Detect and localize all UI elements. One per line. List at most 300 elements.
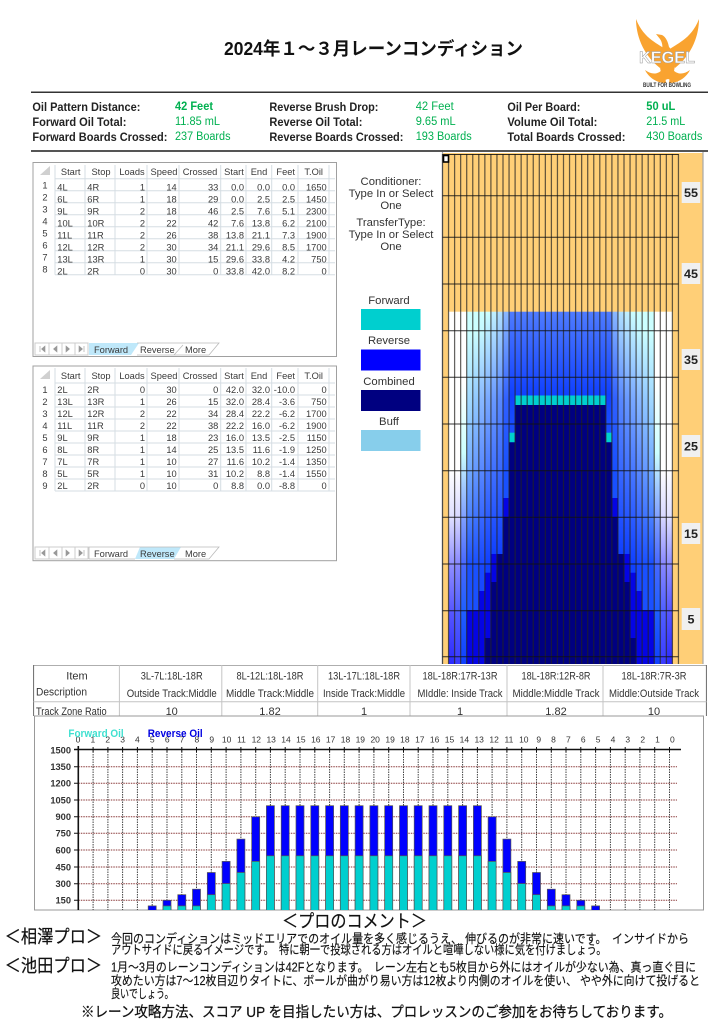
panel: forward table: 13.8 (226, 230, 244, 240)
panel: forward table: Crossed (183, 167, 217, 177)
panel: forward table: 34 (208, 242, 218, 252)
chart: oil per board bars: 9 (209, 734, 214, 744)
chart: lane oil pattern graph (442, 152, 703, 664)
panel: forward table: 2300 (306, 206, 327, 216)
panel: forward table: 0.0 (282, 182, 295, 192)
panel: reverse table: 32.0 (252, 385, 270, 395)
text block: Aizawa comment: ＜相澤プロ＞ (5, 927, 102, 947)
panel: reverse table: 25 (208, 445, 218, 455)
panel: oil pattern summary: Reverse Oil Total: (269, 117, 362, 129)
chart: oil per board bars: 750 (55, 829, 71, 839)
panel: forward table: 0.0 (231, 194, 244, 204)
panel: reverse table: 1250 (306, 445, 327, 455)
panel: reverse table: 7R (87, 457, 99, 467)
panel: reverse table: 0 (322, 385, 327, 395)
panel: reverse table: 10.2 (226, 469, 244, 479)
chart: oil per board bars: 2 (105, 734, 110, 744)
chart: lane oil pattern graph: 55 (684, 186, 698, 200)
chart: oil per board bars: 2 (640, 734, 645, 744)
panel: forward table: 42.0 (252, 266, 270, 276)
chart: oil per board bars: 16 (430, 734, 440, 744)
chart: oil per board bars: 20 (370, 734, 380, 744)
title: 2024年１～３月レーンコンディション (224, 38, 523, 59)
chart: oil per board bars: Forward Oil (68, 728, 124, 740)
panel: forward table: 6R (87, 194, 99, 204)
panel: reverse table: 22.2 (252, 409, 270, 419)
panel: forward table: 2 (140, 242, 145, 252)
panel: forward table: 33.8 (226, 266, 244, 276)
panel: reverse table: 32.0 (226, 397, 244, 407)
panel: reverse table: -8.8 (279, 481, 295, 491)
chart: oil per board bars: 5 (596, 734, 601, 744)
chart: lane oil pattern graph: 35 (684, 353, 698, 367)
chart: oil per board bars: 8 (551, 734, 556, 744)
chart: oil per board bars: 18 (400, 734, 410, 744)
panel: track zone ratio table: Inside Track:Middle (323, 688, 405, 700)
panel: forward table: 29.6 (226, 254, 244, 264)
panel: reverse table: 0.0 (257, 481, 270, 491)
panel: reverse table: 1350 (306, 457, 327, 467)
text block: Aizawa comment (5, 927, 689, 957)
chart: lane oil pattern graph: 15 (684, 527, 698, 541)
panel: forward table: 5 (42, 228, 48, 238)
panel: reverse table: 8.8 (257, 469, 270, 479)
text: conditioner and transfer type (349, 176, 434, 253)
panel: forward table: 1450 (306, 194, 327, 204)
panel: reverse table: 5 (42, 433, 48, 443)
panel: forward table: 18 (166, 206, 177, 216)
chart: oil per board bars: 11 (237, 734, 246, 744)
panel: forward table: 1 (140, 254, 145, 264)
panel: forward table: 4 (42, 216, 48, 226)
panel: forward table: 7.6 (257, 206, 270, 216)
panel: track zone ratio table: Middle:Outside Track (609, 688, 699, 700)
panel: forward table: 8.2 (282, 266, 295, 276)
panel: forward table: More (185, 345, 206, 355)
panel: forward table: 750 (311, 254, 327, 264)
panel: reverse table: 1 (140, 397, 145, 407)
panel: forward table: 4L (57, 182, 68, 192)
panel: forward table: Forward (94, 345, 128, 355)
panel: reverse table: 8.8 (231, 481, 244, 491)
chart: oil per board bars: 18 (341, 734, 350, 744)
panel: reverse table: 9R (87, 433, 99, 443)
panel: reverse table: 8 (42, 469, 48, 479)
callout: lesson invitation: ※レーン攻略方法、スコア UP を目指したい方は、プロレッスンのご参加をお待ちしております。 (81, 1004, 672, 1021)
panel: forward table: 7.6 (231, 218, 244, 228)
chart: oil per board bars: 0 (670, 734, 675, 744)
panel: forward table: Reverse (140, 345, 175, 355)
panel: reverse table: 9L (57, 433, 68, 443)
panel: oil pattern summary: Reverse Boards Crossed: (269, 132, 403, 144)
panel: forward table: 1700 (306, 242, 327, 252)
panel: reverse table: End (251, 371, 267, 381)
panel: forward table: 6 (42, 240, 48, 250)
panel: forward table: 8 (42, 264, 48, 274)
chart: oil per board bars: 8 (195, 734, 200, 744)
panel: forward table: 0 (322, 266, 327, 276)
text: conditioner and transfer type: TransferType: (356, 217, 426, 229)
panel: oil pattern summary: 237 Boards (175, 131, 231, 143)
panel: forward table: 15 (208, 254, 218, 264)
chart: oil per board bars: 450 (55, 862, 71, 872)
chart: oil per board bars: 600 (55, 845, 71, 855)
panel: forward table: 0 (140, 266, 145, 276)
panel: track zone ratio table: 1 (457, 706, 463, 718)
panel: forward table: 2 (42, 192, 48, 202)
panel: forward table: 2100 (306, 218, 327, 228)
panel: reverse table: 15 (208, 397, 218, 407)
chart: oil per board bars: 14 (460, 734, 469, 744)
text: conditioner and transfer type: Type In or Select (349, 188, 434, 200)
panel: forward table: 9L (57, 206, 68, 216)
chart: oil per board bars: 3 (120, 734, 125, 744)
panel: reverse table: 38 (208, 421, 218, 431)
chart: oil per board bars: 150 (55, 896, 71, 906)
panel: forward table: 21.1 (252, 230, 270, 240)
chart: oil per board bars: 900 (55, 812, 71, 822)
panel: track zone ratio table: 10 (648, 706, 660, 718)
panel: reverse table: 1700 (306, 409, 327, 419)
panel: forward table: 29.6 (252, 242, 270, 252)
panel: reverse table: 7L (57, 457, 68, 467)
panel: forward table: 8.5 (282, 242, 295, 252)
panel: reverse table: 5L (57, 469, 68, 479)
panel: reverse table: T.Oil (304, 371, 323, 381)
panel: reverse table: 10 (166, 481, 177, 491)
panel: forward table: 2R (87, 266, 99, 276)
panel: reverse table: -6.2 (279, 421, 295, 431)
chart: oil per board bars: 14 (281, 734, 291, 744)
panel: reverse table: 22.2 (226, 421, 244, 431)
panel: oil pattern summary: Oil Pattern Distance: (32, 102, 140, 114)
panel: reverse table: 34 (208, 409, 218, 419)
panel: oil pattern summary: Forward Boards Crossed: (32, 132, 167, 144)
panel: reverse table: 12L (57, 409, 73, 419)
panel: forward table: 6.2 (282, 218, 295, 228)
panel: oil pattern summary: Total Boards Crossed: (507, 132, 625, 144)
panel: reverse table: 27 (208, 457, 218, 467)
panel: reverse table: 2R (87, 481, 99, 491)
panel: forward table: 30 (166, 254, 177, 264)
panel: forward table: 2 (140, 206, 145, 216)
panel: track zone ratio table: 18L-18R:12R-8R (522, 670, 591, 682)
panel: reverse table: 12R (87, 409, 105, 419)
panel: track zone ratio table: 3L-7L:18L-18R (141, 670, 203, 682)
panel: reverse table: 1550 (306, 469, 327, 479)
chart: oil per board bars: 15 (445, 734, 454, 744)
chart: oil per board bars: 6 (165, 734, 170, 744)
chart: oil per board bars: 1050 (50, 795, 71, 805)
panel: reverse table: 30 (166, 385, 177, 395)
panel: track zone ratio table: 8L-12L:18L-18R (236, 670, 304, 682)
chart: oil per board bars: 3 (625, 734, 630, 744)
icon: Kegel logo (636, 19, 699, 89)
text block: Ikeda comment (5, 956, 700, 1001)
chart: oil per board bars: 4 (135, 734, 140, 744)
panel: forward table: 7.3 (282, 230, 295, 240)
panel: forward table: 13.8 (252, 218, 270, 228)
panel: forward table: 38 (208, 230, 218, 240)
panel: forward table: 12L (57, 242, 73, 252)
panel: track zone ratio table: 1.82 (259, 706, 281, 718)
panel: track zone ratio table: 1.82 (545, 706, 567, 718)
panel: reverse table: 1 (140, 457, 145, 467)
panel: forward table: 10L (57, 218, 73, 228)
panel: forward table: 29 (208, 194, 218, 204)
bars: reverse oil (148, 806, 600, 916)
panel: reverse table: Speed (151, 371, 177, 381)
panel: forward table: Start (61, 167, 81, 177)
chart: oil per board bars: 6 (581, 734, 586, 744)
legend: oil types: Buff (379, 416, 400, 428)
chart: oil per board bars: 12 (252, 734, 261, 744)
panel: oil pattern summary: 11.85 mL (175, 116, 221, 128)
panel: reverse table: 0 (213, 481, 218, 491)
panel: forward table: 11L (57, 230, 72, 240)
panel: reverse table: 3 (42, 409, 48, 419)
panel: reverse table: Stop (91, 371, 111, 381)
panel: oil pattern summary (32, 101, 703, 144)
panel: reverse table: 10 (166, 469, 177, 479)
panel: forward table: Feet (276, 167, 295, 177)
panel: reverse table: 11L (57, 421, 72, 431)
panel: forward table: 33 (208, 182, 218, 192)
panel: reverse table: 8R (87, 445, 99, 455)
panel: reverse table: 8L (57, 445, 68, 455)
panel: forward table: 1650 (306, 182, 327, 192)
panel: forward table: 2.5 (257, 194, 270, 204)
panel: forward table: 4R (87, 182, 99, 192)
text: conditioner and transfer type: Conditioner: (361, 176, 421, 188)
panel: reverse table: Forward (94, 549, 128, 559)
panel: forward table: Stop (91, 167, 111, 177)
chart: oil per board bars: 17 (326, 734, 336, 744)
panel: forward table: 26 (166, 230, 177, 240)
panel: forward table: 30 (166, 266, 177, 276)
panel: reverse table: 0 (213, 385, 218, 395)
panel: reverse table (33, 366, 336, 561)
panel: reverse table: 1 (140, 433, 145, 443)
panel: forward table: 0.0 (257, 182, 270, 192)
panel: reverse table: Crossed (183, 371, 217, 381)
panel: reverse table: -2.5 (279, 433, 295, 443)
text block: Ikeda comment: ＜池田プロ＞ (5, 956, 102, 976)
panel: forward table: 10R (87, 218, 105, 228)
panel: reverse table: 11R (87, 421, 104, 431)
chart: oil per board bars: 17 (415, 734, 425, 744)
panel: forward table: 11R (87, 230, 104, 240)
panel: reverse table: -3.6 (279, 397, 295, 407)
panel: reverse table: 22 (166, 409, 177, 419)
panel: reverse table: 13.5 (252, 433, 270, 443)
chart: oil per board bars: 16 (311, 734, 321, 744)
panel: forward table: 0.0 (231, 182, 244, 192)
panel: track zone ratio table: 13L-17L:18L-18R (328, 670, 400, 682)
panel: reverse table: Start (224, 371, 244, 381)
panel: reverse table: -6.2 (279, 409, 295, 419)
chart: oil per board bars: 13 (474, 734, 484, 744)
chart: oil per board bars: 300 (55, 879, 71, 889)
chart: oil per board bars: 1 (91, 734, 96, 744)
chart: oil per board bars: 0 (76, 734, 81, 744)
panel: forward table: 2 (140, 230, 145, 240)
legend: oil types (361, 295, 420, 451)
panel: oil pattern summary: 42 Feet (416, 101, 454, 113)
panel: forward table: 6L (57, 194, 68, 204)
panel: reverse table: 1150 (307, 433, 327, 443)
panel: forward table: 42 (208, 218, 218, 228)
panel: track zone ratio table: 18L-18R:7R-3R (622, 670, 687, 682)
heading: pro comments: ＜プロのコメント＞ (282, 912, 427, 932)
panel: reverse table: 22 (166, 421, 177, 431)
panel: reverse table: 28.4 (226, 409, 244, 419)
panel: reverse table: 18 (166, 433, 177, 443)
panel: reverse table: 7 (42, 457, 48, 467)
panel: reverse table: Feet (276, 371, 295, 381)
panel: reverse table: 10 (166, 457, 177, 467)
panel: reverse table: 42.0 (226, 385, 244, 395)
chart: oil per board bars: 10 (222, 734, 232, 744)
icon: Kegel logo: KEGEL (639, 48, 695, 67)
chart: oil per board bars: 12 (489, 734, 499, 744)
panel: forward table: 2.5 (231, 206, 244, 216)
chart: oil per board bars: 5 (150, 734, 155, 744)
panel: forward table: 1900 (306, 230, 327, 240)
panel: reverse table: 2 (140, 421, 145, 431)
panel: track zone ratio table: 18L-18R:17R-13R (422, 670, 498, 682)
panel: forward table: 1 (140, 182, 145, 192)
panel: forward table: 2L (57, 266, 68, 276)
panel: track zone ratio table: Outside Track:Middle (127, 688, 217, 700)
panel: reverse table: -1.9 (279, 445, 295, 455)
panel: forward table: End (251, 167, 267, 177)
panel: reverse table: 28.4 (252, 397, 270, 407)
text: conditioner and transfer type: One (380, 200, 402, 212)
text: conditioner and transfer type: One (380, 241, 402, 253)
panel: reverse table: 14 (166, 445, 177, 455)
chart: lane oil pattern graph: 25 (684, 440, 698, 454)
panel: forward table: 0 (213, 266, 218, 276)
panel: reverse table: 2R (87, 385, 99, 395)
chart: oil per board bars: 15 (296, 734, 306, 744)
panel: forward table: 5.1 (282, 206, 295, 216)
panel: forward table: T.Oil (304, 167, 323, 177)
legend: oil types: Combined (363, 376, 415, 388)
chart: oil per board bars: 1500 (50, 745, 71, 755)
panel: reverse table: 9 (42, 481, 48, 491)
panel: forward table: 3 (42, 204, 48, 214)
panel: forward table: Loads (119, 167, 145, 177)
panel: forward table: 46 (208, 206, 218, 216)
panel: forward table: 9R (87, 206, 99, 216)
panel: reverse table: 0 (322, 481, 327, 491)
panel: track zone ratio table: 10 (166, 706, 178, 718)
chart: oil per board bars: 1350 (50, 762, 71, 772)
chart: oil per board bars: 19 (356, 734, 365, 744)
panel: reverse table: 0 (140, 481, 145, 491)
chart: oil per board bars: 7 (180, 734, 185, 744)
panel: reverse table: Start (61, 371, 81, 381)
bars: forward oil (163, 856, 585, 916)
text block: Ikeda comment: 良いでしょう。 (111, 986, 174, 1001)
chart: lane oil pattern graph: 45 (684, 267, 698, 281)
panel: reverse table: 1 (42, 385, 48, 395)
panel: oil pattern summary: Forward Oil Total: (32, 117, 126, 129)
panel: reverse table: 5R (87, 469, 99, 479)
panel: forward table: 12R (87, 242, 105, 252)
panel: forward table: 14 (166, 182, 177, 192)
panel: track zone ratio table: 1 (361, 706, 367, 718)
chart: oil per board bars (34, 716, 704, 916)
legend: oil types: Forward (368, 295, 410, 307)
panel: forward table: 4.2 (282, 254, 295, 264)
panel: oil pattern summary: 193 Boards (416, 131, 472, 143)
chart: oil per board bars: Reverse Oil (148, 728, 203, 740)
panel: track zone ratio table: Description (36, 686, 87, 698)
panel: track zone ratio table: Middle Track:Middle (226, 688, 314, 700)
panel: track zone ratio table: Middle:Middle Track (512, 688, 600, 700)
text block: Aizawa comment: アウトサイドに戻るイメージです。 特に朝一で投球される方はオイルと喧嘩しない様に気を付けましょう。 (111, 942, 606, 957)
chart: oil per board bars: 1 (655, 734, 660, 744)
panel: forward table: 33.8 (252, 254, 270, 264)
panel: forward table: 2.5 (282, 194, 295, 204)
chart: oil per board bars: 11 (504, 734, 514, 744)
panel: reverse table: -1.4 (279, 469, 295, 479)
panel: forward table: 21.1 (226, 242, 244, 252)
chart: oil per board bars: 9 (536, 734, 541, 744)
panel: reverse table: 31 (208, 469, 218, 479)
panel: reverse table: 750 (311, 397, 327, 407)
panel: oil pattern summary: 9.65 mL (416, 116, 456, 128)
panel: forward table: 2 (140, 218, 145, 228)
panel: reverse table: 16.0 (252, 421, 270, 431)
panel: reverse table: Loads (119, 371, 145, 381)
panel: track zone ratio table: Track Zone Ratio (36, 706, 107, 718)
panel: reverse table: 1 (140, 469, 145, 479)
panel: reverse table: 6 (42, 445, 48, 455)
chart: oil per board bars: 19 (385, 734, 395, 744)
chart: oil per board bars: 4 (611, 734, 616, 744)
chart: oil per board bars: 13 (266, 734, 276, 744)
panel: reverse table: 2L (57, 385, 68, 395)
panel: reverse table: -1.4 (279, 457, 295, 467)
panel: oil pattern summary: 50 uL (646, 101, 675, 113)
panel: reverse table: Reverse (140, 549, 175, 559)
panel: reverse table: 26 (166, 397, 177, 407)
panel: reverse table: 4 (42, 421, 48, 431)
panel: forward table: 13R (87, 254, 105, 264)
panel: reverse table: 2 (42, 397, 48, 407)
panel: oil pattern summary: 42 Feet (175, 101, 213, 113)
panel: oil pattern summary: Volume Oil Total: (507, 117, 597, 129)
panel: reverse table: 13.5 (226, 445, 244, 455)
panel: reverse table: 11.6 (253, 445, 270, 455)
legend: oil types: Reverse (368, 335, 410, 347)
panel: forward table (33, 162, 336, 356)
panel: forward table: 1 (42, 180, 48, 190)
panel: reverse table: 23 (208, 433, 218, 443)
panel: reverse table: -10.0 (274, 385, 295, 395)
panel: reverse table: 13R (87, 397, 105, 407)
panel: oil pattern summary: Reverse Brush Drop: (269, 102, 378, 114)
text: conditioner and transfer type: Type In or Select (349, 229, 434, 241)
chart: oil per board bars: 7 (566, 734, 571, 744)
panel: forward table: Start (224, 167, 244, 177)
panel: forward table: 13L (57, 254, 73, 264)
icon: Kegel logo: BUILT FOR BOWLING (643, 83, 691, 89)
panel: track zone ratio table: MIddle: Inside Track (418, 688, 503, 700)
